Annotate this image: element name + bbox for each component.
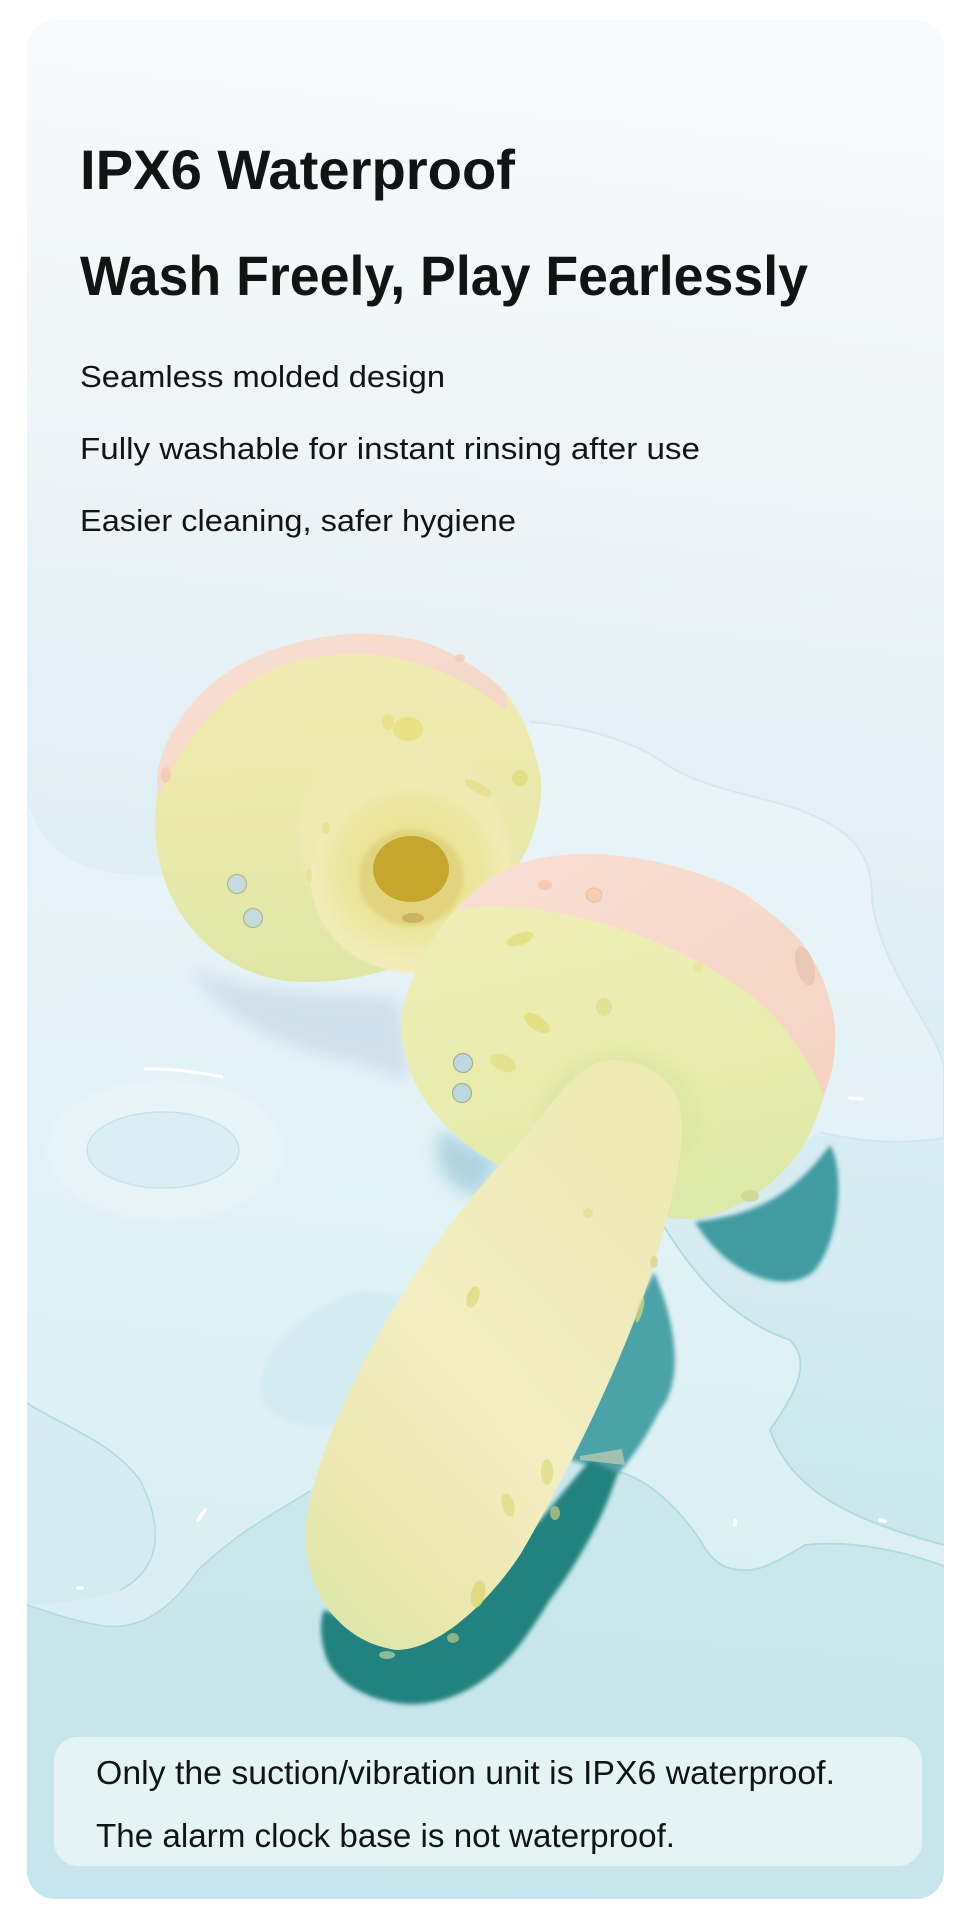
water puddles <box>27 722 944 1627</box>
heading <box>80 138 808 307</box>
handle <box>306 1060 682 1650</box>
feature 1: Seamless molded design <box>80 359 445 394</box>
feature 2: Fully washable for instant rinsing after use <box>80 431 700 466</box>
heading line 2: Wash Freely, Play Fearlessly <box>80 244 808 307</box>
product: back mushroom head <box>155 634 541 982</box>
tube end <box>311 784 511 972</box>
shadows <box>190 965 838 1704</box>
front cap pins <box>454 1054 472 1072</box>
front cap pink band <box>455 854 835 1096</box>
back neck <box>299 736 513 971</box>
product: front mushroom <box>306 854 835 1659</box>
handle base shading <box>540 1050 700 1190</box>
droplets <box>505 929 535 949</box>
back cap pins <box>228 874 246 894</box>
note line 1: Only the suction/vibration unit is IPX6 waterproof. <box>96 1754 835 1791</box>
heading line 1: IPX6 Waterproof <box>80 138 515 201</box>
feature 3: Easier cleaning, safer hygiene <box>80 503 516 538</box>
feature list <box>80 359 700 538</box>
back cap pink band <box>157 634 507 796</box>
droplets <box>393 717 423 741</box>
back cap <box>155 634 541 982</box>
note panel <box>54 1737 922 1866</box>
front cap <box>401 854 835 1219</box>
note line 2: The alarm clock base is not waterproof. <box>96 1817 675 1854</box>
iridescent water edge <box>580 1449 625 1465</box>
